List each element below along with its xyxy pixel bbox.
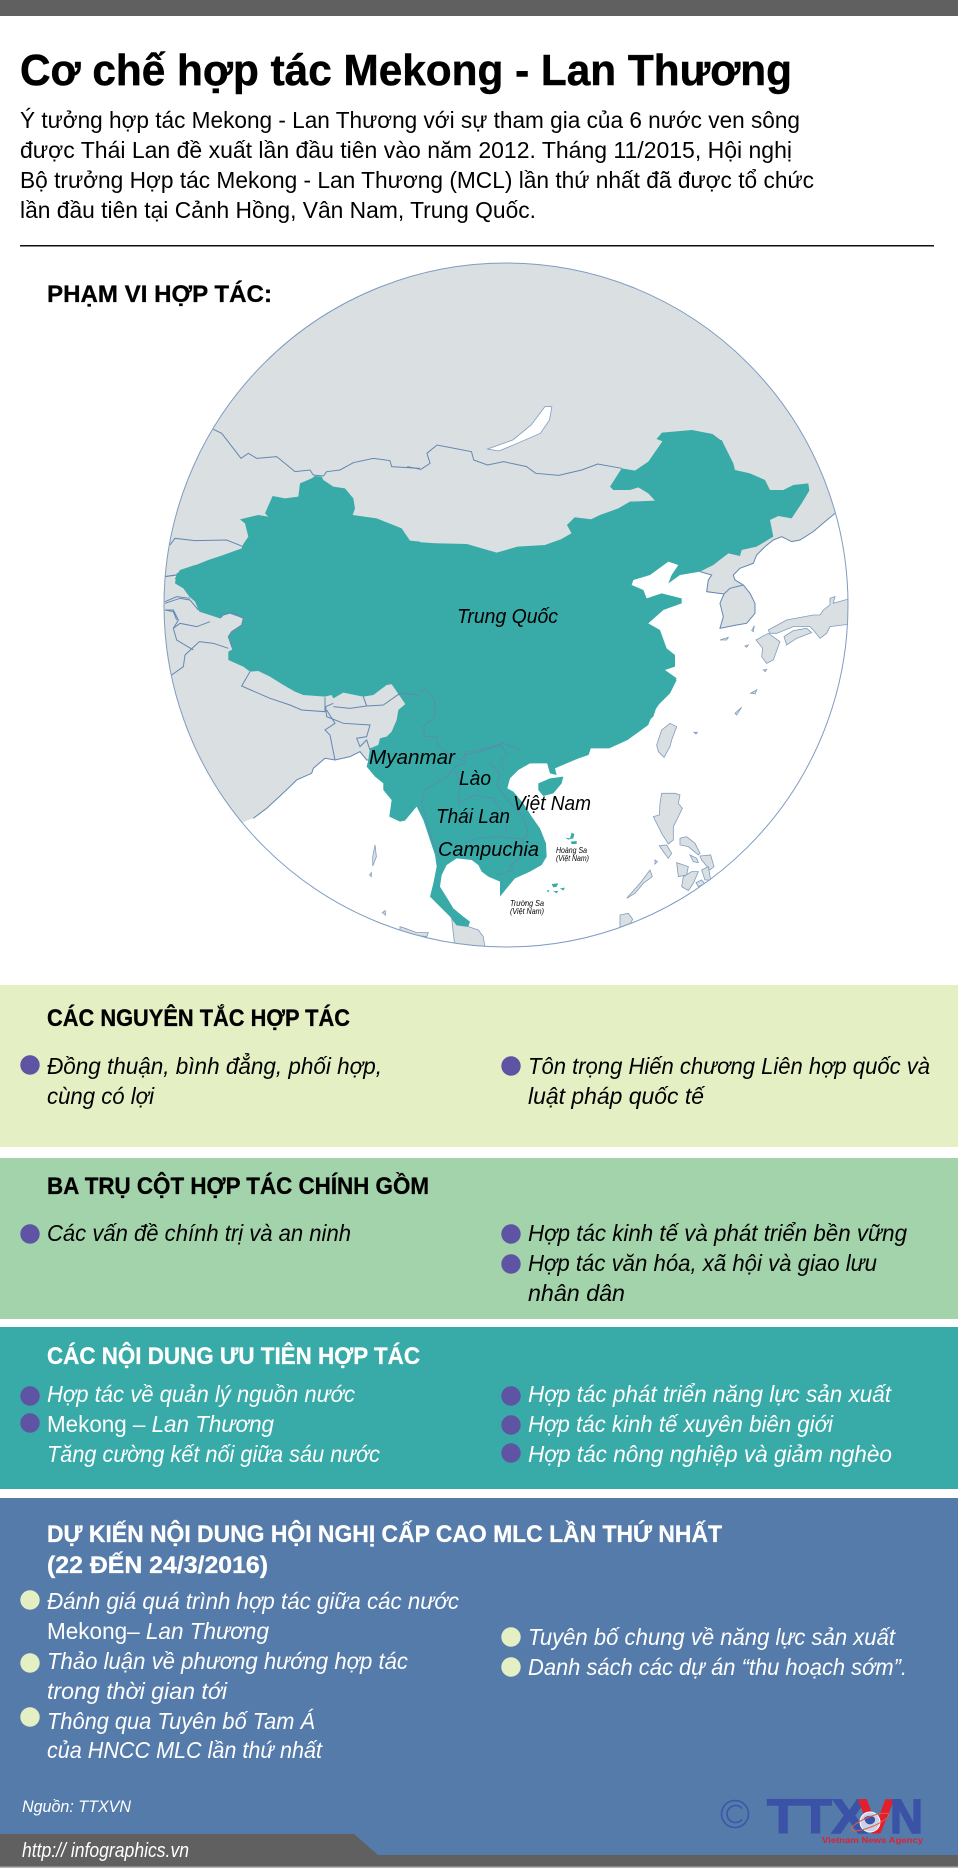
priorities items: Hợp tác phát triển năng lực sản xuất: [528, 1381, 893, 1407]
summit items: Tuyên bố chung về năng lực sản xuất: [528, 1624, 897, 1650]
summit items: của HNCC MLC lần thứ nhất: [47, 1737, 324, 1763]
pillars items: Hợp tác kinh tế và phát triển bền vững: [528, 1220, 907, 1246]
summit items: Mekong– Lan Thương: [47, 1618, 269, 1644]
map labels: Hoàng Sa: [556, 845, 587, 855]
summit items: Danh sách các dự án “thu hoạch sớm”.: [528, 1654, 907, 1680]
priorities items: [20, 1381, 893, 1467]
icon: copyright: [722, 1800, 748, 1828]
heading: pillars: BA TRỤ CỘT HỢP TÁC CHÍNH GỒM: [47, 1172, 429, 1200]
map labels: Lào: [459, 768, 491, 790]
summit items: Thông qua Tuyên bố Tam Á: [47, 1708, 315, 1734]
pillars items: Hợp tác văn hóa, xã hội và giao lưu: [528, 1250, 877, 1276]
map labels: Myanmar: [369, 747, 456, 769]
pillars items: nhân dân: [528, 1280, 625, 1306]
priorities items: Mekong – Lan Thương: [47, 1411, 274, 1437]
intro text: [20, 107, 814, 223]
pillars items: [20, 1220, 907, 1306]
top bar: [0, 0, 958, 16]
heading: priorities: CÁC NỘI DUNG ƯU TIÊN HỢP TÁC: [47, 1342, 420, 1370]
map labels: Trung Quốc: [457, 606, 558, 628]
heading: summit agenda: DỰ KIẾN NỘI DUNG HỘI NGHỊ CẤP CAO MLC LẦN THỨ NHẤT: [47, 1520, 722, 1548]
summit items: trong thời gian tới: [47, 1678, 228, 1704]
panel: three pillars: [0, 1158, 958, 1319]
logo: TTXVN: N: [890, 1791, 923, 1844]
principles items: cùng có lợi: [47, 1083, 155, 1109]
country borders: [165, 429, 622, 875]
intro text: Ý tưởng hợp tác Mekong - Lan Thương với sự tham gia của 6 nước ven sông: [20, 107, 800, 133]
teal: China and Mekong countries: [175, 430, 809, 927]
principles items: Đồng thuận, bình đẳng, phối hợp,: [47, 1051, 382, 1079]
summit items: Đánh giá quá trình hợp tác giữa các nước: [47, 1588, 459, 1614]
source: Nguồn: TTXVN: [22, 1797, 132, 1816]
map base: land and countries: [164, 264, 848, 946]
heading: principles: CÁC NGUYÊN TẮC HỢP TÁC: [47, 1004, 350, 1032]
logo: TTXVN: TTX: [767, 1791, 867, 1844]
footer bar: [0, 1834, 958, 1867]
map labels: (Việt Nam): [510, 906, 544, 916]
map labels: Campuchia: [438, 839, 539, 861]
map labels: [369, 606, 591, 916]
priorities items: Hợp tác về quản lý nguồn nước: [47, 1381, 355, 1407]
map: cooperation area: [164, 262, 848, 948]
heading: summit agenda: [47, 1520, 722, 1579]
priorities items: Hợp tác kinh tế xuyên biên giới: [528, 1411, 834, 1437]
principles items: Tôn trọng Hiến chương Liên hợp quốc và: [528, 1053, 930, 1079]
footer url: http:// infographics.vn: [22, 1840, 189, 1862]
summit items: [20, 1588, 907, 1763]
panel: summit agenda: [0, 1498, 958, 1868]
heading: summit agenda: (22 ĐẾN 24/3/2016): [47, 1551, 268, 1579]
logo: TTXVN: Vietnam News Agency: [822, 1835, 923, 1845]
title: Cơ chế hợp tác Mekong - Lan Thương: [20, 46, 792, 95]
principles items: [20, 1051, 930, 1109]
pillars items: Các vấn đề chính trị và an ninh: [47, 1220, 351, 1246]
logo: TTXVN: [767, 1791, 923, 1845]
logo: TTXVN: V: [858, 1791, 894, 1844]
panel: principles: [0, 985, 958, 1147]
intro text: Bộ trưởng Hợp tác Mekong - Lan Thương (MCL) lần thứ nhất đã được tổ chức: [20, 167, 814, 193]
priorities items: Tăng cường kết nối giữa sáu nước: [47, 1441, 380, 1467]
map labels: (Việt Nam): [556, 853, 589, 863]
intro text: lần đầu tiên tại Cảnh Hồng, Vân Nam, Trung Quốc.: [20, 197, 536, 223]
map labels: Việt Nam: [513, 793, 591, 815]
heading: scope: PHẠM VI HỢP TÁC:: [47, 280, 272, 308]
intro text: được Thái Lan đề xuất lần đầu tiên vào năm 2012. Tháng 11/2015, Hội nghị: [20, 137, 792, 163]
map labels: Thái Lan: [436, 806, 510, 828]
summit items: Thảo luận về phương hướng hợp tác: [47, 1648, 408, 1674]
map outline: [164, 263, 848, 947]
map labels: Trường Sa: [510, 898, 544, 908]
panel: priorities: [0, 1327, 958, 1489]
principles items: luật pháp quốc tế: [528, 1083, 706, 1109]
priorities items: Hợp tác nông nghiệp và giảm nghèo: [528, 1441, 892, 1467]
